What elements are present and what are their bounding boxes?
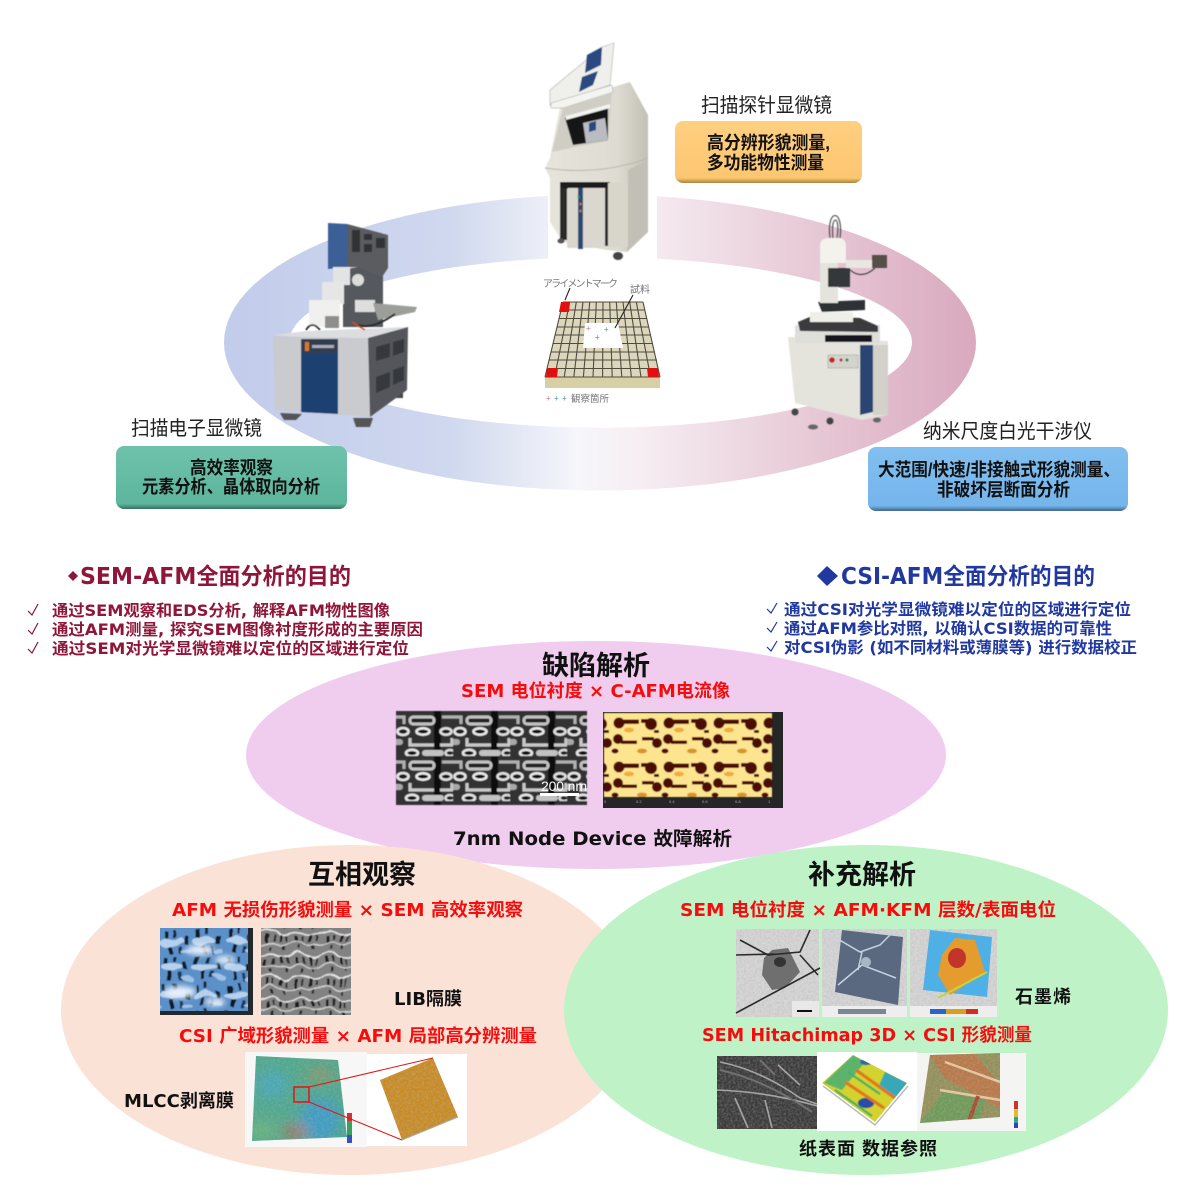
- callout: scanning probe microscope: 多功能物性测量: [707, 153, 824, 173]
- label: white light interferometer: 纳米尺度白光干涉仪: [923, 420, 1092, 443]
- subtitle: CSI and AFM: CSI 广域形貌测量 × AFM 局部高分辨测量: [179, 1025, 537, 1047]
- callout: white light interferometer: 非破坏层断面分析: [937, 479, 1070, 500]
- heading: CSI-AFM purpose: CSI-AFM全面分析的目的: [841, 564, 1095, 590]
- image: SEM potential contrast: 200 nm: [541, 778, 587, 794]
- callout: scanning electron microscope: [116, 446, 347, 509]
- callout: scanning electron microscope: 元素分析、晶体取向分析: [142, 477, 320, 497]
- instrument: scanning probe microscope: [545, 43, 648, 260]
- callout: scanning probe microscope: 高分辨形貌测量,: [707, 132, 830, 153]
- list: SEM-AFM purpose: 通过SEM对光学显微镜难以定位的区域进行定位: [52, 639, 409, 658]
- image: C-AFM current map: 1: [768, 799, 771, 804]
- panel: complementary analysis: [564, 845, 1168, 1175]
- image: paper 3D model: [817, 1052, 917, 1131]
- heading: SEM-AFM purpose: SEM-AFM全面分析的目的: [80, 564, 351, 590]
- subtitle: Hitachimap and CSI: SEM Hitachimap 3D × CSI 形貌测量: [702, 1025, 1032, 1046]
- center diagram: alignment mark sample holder: [543, 278, 660, 405]
- image: SEM potential contrast: [396, 711, 587, 805]
- center diagram: alignment mark sample holder: +: [562, 394, 567, 403]
- list: CSI-AFM purpose: 对CSI伪影 (如不同材料或薄膜等) 进行数据校正: [784, 638, 1137, 657]
- image: C-AFM current map: [603, 712, 783, 808]
- label: scanning probe microscope: 扫描探针显微镜: [701, 94, 832, 117]
- heading: complementary analysis: 补充解析: [808, 860, 916, 890]
- center diagram: alignment mark sample holder: 試料: [630, 283, 650, 296]
- caption: 7nm node device: 7nm Node Device 故障解析: [453, 827, 732, 850]
- image: C-AFM current map: 0: [604, 799, 607, 804]
- list: SEM-AFM purpose: [28, 601, 423, 658]
- instrument: coherence scanning interferometer: [788, 216, 888, 430]
- image: C-AFM current map: 0.6: [702, 799, 708, 804]
- callout: white light interferometer: [868, 447, 1128, 511]
- ring: instrument cycle: [224, 188, 976, 490]
- image: graphene AFM: [822, 929, 907, 1017]
- image: paper CSI map: [917, 1052, 1026, 1131]
- image: AFM local topography: [309, 1054, 467, 1146]
- callout: scanning electron microscope: 高效率观察: [190, 457, 273, 478]
- image: paper SEM: [717, 1056, 817, 1129]
- subtitle: SEM and C-AFM: SEM 电位衬度 × C-AFM电流像: [461, 680, 730, 702]
- image: graphene SEM: [736, 929, 820, 1017]
- image: C-AFM current map: 0.2: [636, 799, 642, 804]
- center diagram: alignment mark sample holder: +: [604, 325, 609, 334]
- label: LIB separator: LIB隔膜: [394, 989, 462, 1010]
- heading: mutual observation: 互相观察: [308, 860, 416, 890]
- image: LIB SEM: [261, 928, 351, 1015]
- label: graphene: 石墨烯: [1015, 987, 1071, 1007]
- list: CSI-AFM purpose: [767, 600, 1137, 657]
- image: C-AFM current map: 0.8: [735, 799, 741, 804]
- subtitle: AFM and SEM: AFM 无损伤形貌测量 × SEM 高效率观察: [172, 899, 523, 921]
- list: SEM-AFM purpose: 通过AFM测量, 探究SEM图像衬度形成的主要原因: [52, 620, 423, 639]
- label: scanning electron microscope: 扫描电子显微镜: [131, 417, 262, 440]
- list: CSI-AFM purpose: 通过CSI对光学显微镜难以定位的区域进行定位: [784, 600, 1131, 619]
- list: CSI-AFM purpose: 通过AFM参比对照, 以确认CSI数据的可靠性: [784, 619, 1112, 638]
- image: C-AFM current map: 0.4: [669, 799, 675, 804]
- center diagram: alignment mark sample holder: +: [554, 394, 559, 403]
- panel: mutual observation: [61, 845, 639, 1175]
- center diagram: alignment mark sample holder: アライメントマーク: [543, 278, 618, 290]
- callout: scanning probe microscope: [675, 121, 862, 183]
- heading: defect analysis: 缺陷解析: [542, 651, 650, 681]
- list: SEM-AFM purpose: 通过SEM观察和EDS分析, 解释AFM物性图像: [52, 601, 390, 620]
- center diagram: alignment mark sample holder: 観察箇所: [571, 393, 609, 405]
- image: CSI wide area map: [245, 1052, 367, 1147]
- center diagram: alignment mark sample holder: +: [595, 333, 600, 342]
- image: LIB AFM: [160, 928, 253, 1015]
- panel: defect analysis: [246, 641, 946, 869]
- callout: white light interferometer: 大范围/快速/非接触式形貌测量、: [878, 460, 1120, 480]
- instrument: scanning electron microscope: [273, 223, 417, 427]
- label: MLCC release film: MLCC剥离膜: [124, 1090, 234, 1112]
- subtitle: SEM and AFM KFM: SEM 电位衬度 × AFM·KFM 层数/表面电位: [680, 899, 1056, 921]
- center diagram: alignment mark sample holder: +: [586, 324, 591, 333]
- image: graphene KFM: [910, 929, 997, 1017]
- caption: paper surface data reference: 纸表面 数据参照: [799, 1138, 937, 1159]
- center diagram: alignment mark sample holder: +: [546, 394, 551, 403]
